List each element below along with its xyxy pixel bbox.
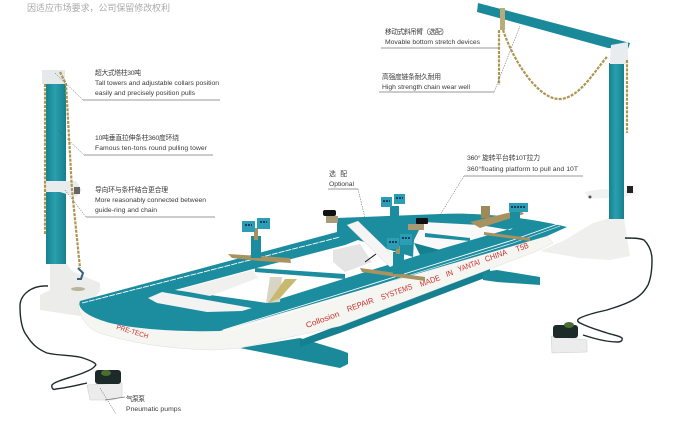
callout: movable bottom stretch (381, 27, 498, 48)
machine lettering: CHINA (484, 247, 509, 264)
callout: pulling tower: 10吨垂直拉伸条柱360度环绕 (95, 133, 179, 142)
window: right opening (413, 222, 513, 257)
left pneumatic pump (87, 370, 122, 400)
brand logo: PRE-TECH (115, 324, 149, 341)
callout: pneumatic pumps: Pneumatic pumps (126, 406, 182, 413)
callout: guide ring: 导向环与条杆结合更合理 (95, 185, 168, 194)
machine lettering: YANTAI (457, 258, 481, 274)
callout: guide ring: guide-ring and chain (95, 207, 157, 214)
cross bar (255, 268, 345, 279)
machine lettering: IN (445, 268, 454, 279)
callout: tall towers (55, 68, 220, 100)
callout: optional: 选 配 (329, 169, 347, 178)
callout: floating platform (440, 153, 583, 215)
platform skirt with lettering (78, 236, 553, 350)
hose: left (20, 286, 96, 389)
callout: tall towers: easily and precisely position pulls (95, 90, 196, 97)
callout: optional (328, 169, 365, 218)
rail stripes (82, 237, 340, 303)
lower beams under platform (240, 268, 540, 368)
callout: pneumatic pumps (100, 388, 182, 414)
callout: guide ring: More reasonably connected between (95, 197, 206, 204)
window: centre opening (175, 240, 413, 303)
callout: movable bottom stretch: Movable bottom stretch devices (385, 39, 481, 46)
machine lettering: T5B (515, 241, 530, 254)
machine lettering: REPAIR (346, 296, 375, 314)
note: specification disclaimer: 因适应市场要求，公司保留修改权利 (27, 2, 170, 13)
machine lettering: SYSTEMS (380, 282, 414, 302)
platform top surface (79, 214, 567, 331)
callout: guide ring (65, 185, 215, 217)
callout: pulling tower (58, 130, 213, 155)
machine lettering: Collosion (305, 309, 341, 330)
callout: floating platform: 360°floating platform to pull and 10T (467, 165, 578, 173)
left tower (40, 70, 100, 316)
callout: tall towers: 超大式塔柱30吨 (95, 68, 141, 77)
callout: high strength chain: 高强度链条耐久耐用 (382, 72, 441, 81)
callout: high strength chain: High strength chain wear well (382, 84, 470, 91)
machine lettering (305, 241, 530, 330)
callout: high strength chain (379, 26, 520, 92)
callout: optional: Optional (329, 181, 354, 188)
right tower with boom (477, 3, 636, 260)
callout: pneumatic pumps: 气泵泵 (126, 394, 145, 403)
callout: tall towers: Tall towers and adjustable collars position (95, 80, 219, 87)
hose: right (578, 238, 652, 342)
callout: floating platform: 360° 旋转平台转10T拉力 (467, 153, 540, 162)
right pneumatic pump (551, 322, 587, 353)
machine lettering: MADE (419, 273, 441, 289)
callout: movable bottom stretch: 移动式斜吊臂（选配） (385, 27, 448, 36)
callout: pulling tower: Famous ten-tons round pulling tower (95, 145, 208, 152)
window: left opening (148, 292, 252, 312)
clamps and pulling posts (228, 194, 530, 281)
scissor lift arms (333, 244, 372, 272)
